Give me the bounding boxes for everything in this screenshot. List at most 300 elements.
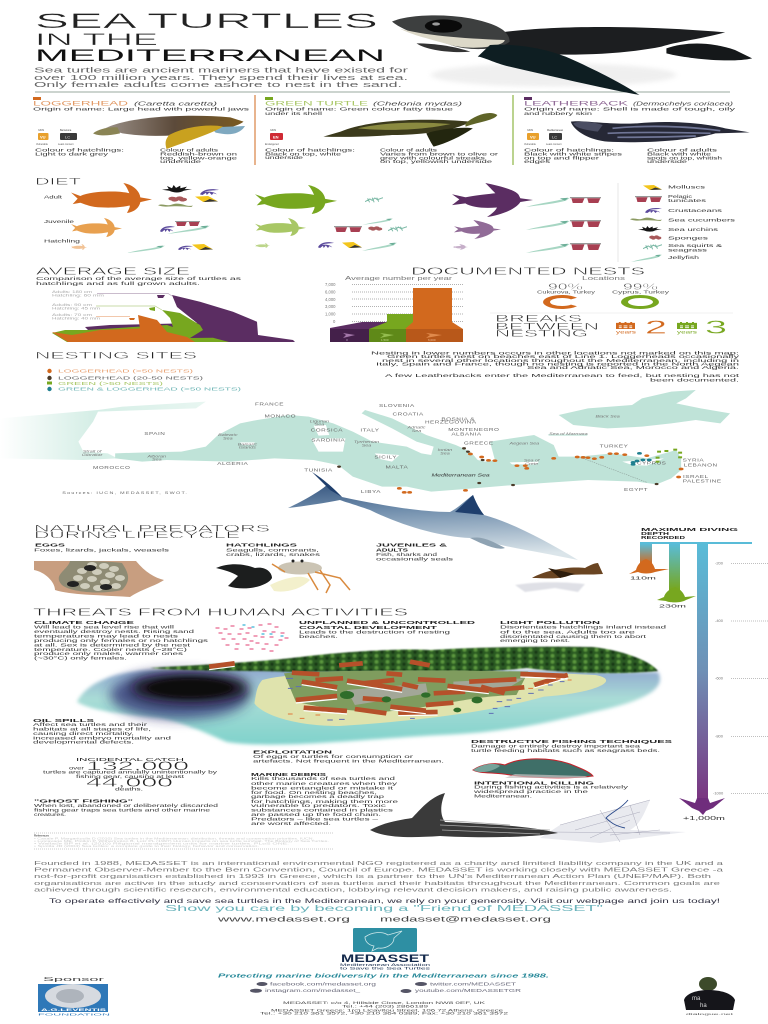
map labels: Sea — [152, 457, 162, 461]
stat: incidental catch: turtles are captured annually unintentionally by — [43, 770, 219, 774]
predator text: JUVENILES & — [376, 542, 448, 548]
call to action: To operate effectively and save sea turtles in the Mediterranean, we rely on your generosity. Visit our webpage and join us today! — [49, 899, 721, 905]
map labels: Ligurian — [310, 419, 330, 423]
text: ghost fishing: When lost, abandoned or deliberately discarded — [34, 803, 219, 808]
turtle silhouettes: loggerhead — [71, 183, 152, 250]
map labels: ALGERIA — [217, 462, 248, 467]
icon: purple turtle at 1000 m — [679, 798, 725, 815]
heading: max diving depth: MAXIMUM DIVING — [641, 527, 740, 532]
predator text: Seagulls, cormorants, — [226, 548, 319, 552]
title: SEA TURTLES — [35, 10, 378, 33]
bar chart: average nests per year: 6,000 — [325, 290, 336, 294]
text: marine debris — [251, 772, 399, 826]
food icons: green — [318, 198, 407, 251]
text: climate change: at all. Sex is determined by the nest — [34, 642, 192, 648]
badge: IUCN VU and LC: Least concern — [58, 143, 74, 146]
row labels — [44, 194, 81, 244]
nest markers — [337, 447, 684, 494]
donut: loggerhead 90% — [543, 295, 577, 309]
text: light pollution: Disorientates hatchlings inland instead — [500, 624, 667, 630]
designer figure: ha — [700, 1003, 707, 1009]
address: Tel.: +44 (203) 2866189 — [342, 1004, 428, 1008]
text: marine debris: become entangled or mistake it — [251, 786, 395, 790]
panel: maximum diving depth: 230m — [659, 604, 687, 608]
text: marine debris: garbage becomes a deadly trap — [251, 794, 385, 799]
heading: documented nests: DOCUMENTED NESTS — [411, 266, 645, 278]
panel: about MEDASSET — [34, 861, 735, 1016]
diet legend: seagrass — [668, 248, 707, 252]
text: oil spills: habitats at all stages of life, — [33, 726, 151, 732]
trees — [340, 691, 483, 712]
diet legend: Jellyfish — [668, 255, 700, 260]
badge: IUCN VU and LC: LC — [552, 134, 557, 140]
predator text: EGGS — [35, 542, 67, 548]
logo: MEDASSET: to Save the Sea Turtles — [340, 965, 430, 970]
references: References — [34, 834, 50, 838]
diet legend: Crustaceans — [668, 208, 722, 213]
text: climate change: producing only females or no hatchlings — [34, 638, 210, 643]
panel: green turtle: on top, yellowish underside — [380, 159, 493, 164]
panel: leatherback: on top and flipper — [524, 156, 600, 160]
depth bars — [640, 544, 708, 800]
map labels: MONACO — [265, 414, 296, 419]
about text — [34, 861, 725, 893]
bar chart: average nests per year: 3,000 — [325, 304, 336, 309]
map labels: Adriatic — [406, 425, 426, 429]
panel: loggerhead — [33, 97, 251, 164]
size labels — [52, 290, 104, 320]
note text: Green turtles nest on beaches east of Line 1. Loggerheads occasionally — [387, 354, 741, 359]
size labels: Hatchling: 45 mm — [52, 306, 100, 310]
size labels: Adults: 90 cm — [52, 303, 92, 307]
badge: IUCN VU and LC: Vulnerable — [36, 143, 48, 146]
text: climate change: (~30°C) only females. — [34, 656, 127, 660]
panel: threats — [33, 606, 686, 849]
map labels: LEBANON — [684, 463, 718, 468]
panel: natural predators: DURING LIFECYCLE — [34, 530, 240, 540]
predator text: Foxes, lizards, jackals, weasels — [34, 548, 170, 552]
village — [209, 662, 606, 726]
badge: IUCN VU and LC: VU — [40, 134, 46, 140]
text: exploitation — [253, 750, 444, 764]
map labels: CYPRUS — [637, 461, 666, 466]
sponsor logo: A.G.LEVENTIS — [41, 1008, 108, 1012]
sponsor logo: Sponsor — [43, 977, 105, 983]
map labels — [62, 402, 722, 495]
panel: green turtle: (Chelonia mydas) — [373, 102, 462, 108]
food icons: leatherback — [526, 197, 601, 253]
map labels: Islands — [239, 445, 257, 449]
sea — [77, 668, 660, 745]
text: marine debris: are worst affected. — [251, 821, 331, 826]
references: • Spotila JR (2004) Sea turtles: a complete guide to their biology, behavior and conservation. — [34, 844, 260, 848]
text: oil spills: causing direct mortality, — [33, 731, 134, 736]
illustration: hero turtle — [392, 15, 752, 95]
diet legend: Sea squirts & — [668, 243, 722, 248]
map labels: Sea of — [524, 458, 540, 462]
stat: nesting locations — [537, 276, 671, 309]
note text: A few Leatherbacks enter the Mediterranean to feed, but nesting has not — [385, 373, 741, 378]
map: Mediterranean — [0, 390, 730, 495]
panel: green turtle: grey with colourful streaks — [380, 156, 485, 160]
panel: breaks between nesting: years — [616, 330, 636, 334]
size labels: Hatchling: 40 mm — [52, 316, 100, 320]
panel: green turtle: GREEN TURTLE — [265, 100, 369, 108]
panel: leatherback: Black with white — [647, 152, 712, 156]
predator text: Fish, sharks and — [376, 552, 438, 557]
text: intentional killing: During fishing activities is a relatively — [474, 784, 629, 790]
illustration: juvenile turtle and shadow — [515, 563, 603, 592]
panel: leatherback — [524, 97, 750, 164]
size labels: Adults: 180 cm — [52, 290, 92, 294]
map labels: MONTENEGRO — [448, 428, 499, 433]
map labels: CORSICA — [311, 428, 343, 433]
address — [260, 1001, 508, 1016]
text: oil spills: Affect sea turtles and their — [33, 722, 148, 727]
title — [35, 10, 385, 65]
sponsor logo — [38, 977, 110, 1016]
map labels: FRANCE — [255, 402, 284, 407]
bar chart: average nests per year: 6,000 — [428, 338, 436, 342]
diet legend: Sea cucumbers — [668, 218, 735, 222]
badge: IUCN EN: IUCN — [270, 129, 276, 132]
stat: incidental catch: fishing gear, causing at least — [76, 774, 186, 779]
predator text: crabs, lizards, snakes — [226, 552, 321, 557]
text: marine debris: Kills thousands of sea turtles and — [251, 776, 396, 781]
icon: orange turtle at 110 m — [629, 559, 669, 574]
heading: max diving depth: RECORDED — [641, 535, 685, 540]
diet legend — [630, 184, 735, 262]
depth scale: -1000 — [713, 790, 724, 796]
icon: scattered hatchlings — [216, 624, 288, 651]
size labels: Adults: 70 cm — [52, 313, 92, 317]
map labels: TURKEY — [600, 444, 628, 449]
panel: leatherback: Black with white stripes — [524, 152, 622, 156]
stat: nesting locations: Cukurova, Turkey — [537, 290, 597, 294]
stat: incidental catch: INCIDENTAL CATCH — [76, 757, 185, 763]
illustration: loggerhead turtle — [93, 116, 245, 149]
stat: incidental catch: deaths. — [115, 786, 143, 792]
illustration: turtle eggs in nest — [34, 561, 164, 597]
text: intentional killing: Mediterranean. — [474, 794, 532, 798]
oil slick — [110, 671, 250, 719]
call to action — [49, 899, 721, 924]
note text: Italy, Spain and France, though no nesting is reported in the North Aegean — [376, 362, 741, 366]
text: ghost fishing: "GHOST FISHING" — [34, 798, 133, 804]
note text: been documented. — [650, 378, 739, 382]
map labels: BOSNIA & — [441, 417, 475, 422]
text: destructive fishing: DESTRUCTIVE FISHING TECHNIQUES — [471, 739, 674, 745]
text: destructive fishing: turtle feeding habitats such as seagrass beds. — [471, 748, 660, 753]
map labels: ITALY — [360, 428, 380, 433]
about text: Permanent Observer-Member to the Bern Convention, Council of Europe. MEDASSET is working closely with MEDASSET Greece -a — [34, 867, 725, 873]
panel: leatherback: spots on top, whitish — [647, 156, 723, 160]
row labels: Hatchling — [44, 238, 81, 244]
turtle silhouettes: green — [255, 185, 337, 248]
panel: loggerhead: top, yellow-orange — [160, 156, 239, 160]
map labels: Alboran — [146, 454, 167, 458]
illustration: shark — [288, 472, 578, 560]
panel: average size: hatchlings and as full grown adults. — [36, 281, 200, 286]
panel: loggerhead: underside — [160, 159, 202, 164]
panel: green turtle: Origin of name: Green colour fatty tissue — [265, 106, 454, 112]
badge: IUCN VU and LC — [36, 129, 77, 146]
icon: green turtle at 230 m — [657, 587, 696, 602]
text: destructive fishing — [471, 739, 674, 753]
illustration: polluted coast — [77, 647, 660, 745]
note text: Nesting in lower numbers occurs in other locations not marked on this map: — [371, 350, 739, 356]
bar chart: average nests per year: 3 — [346, 338, 348, 342]
map legend: GREEN & LOGGERHEAD (>50 NESTS) — [58, 386, 242, 392]
panel: leatherback: Origin of name: Shell is made of tough, oily — [524, 106, 737, 112]
icon: calendar loggerhead — [616, 322, 635, 329]
text: coastal development: UNPLANNED & UNCONTROLLED — [299, 620, 476, 626]
about text: organisations are active in the study and conservation of sea turtles and their habitats throughout the Mediterranean. Common goals are — [34, 881, 720, 887]
panel: leatherback: Colour of adults — [647, 148, 717, 152]
panel: breaks between nesting: years — [677, 330, 697, 334]
panel: green turtle: Varies from brown to olive or — [380, 152, 499, 156]
stat: nesting locations: 99% — [623, 282, 659, 292]
about text: achieved through scientific research, environmental education, lobbying relevant decision makers, and raising public awareness. — [34, 887, 673, 893]
map labels: Sea — [412, 429, 422, 433]
icon: calendar green — [677, 322, 697, 329]
social links: youtube.com/MEDASSETGR — [415, 988, 521, 993]
heading: average size: AVERAGE SIZE — [36, 266, 190, 278]
map labels: GREECE — [464, 441, 494, 446]
call to action: www.medasset.org — [216, 916, 350, 924]
predator text: HATCHLINGS — [226, 542, 299, 548]
row labels: Adult — [44, 194, 64, 200]
text: exploitation: EXPLOITATION — [253, 750, 333, 756]
heading: nesting sites: NESTING SITES — [35, 350, 197, 362]
bar chart: average nests per year: 7,000 — [325, 282, 336, 287]
text: coastal development: Leads to the destruction of nesting — [299, 630, 451, 634]
panel: breaks between nesting: BREAKS — [495, 314, 582, 325]
predator text — [34, 542, 454, 562]
references — [34, 833, 333, 849]
text: marine debris: for food. On nesting beaches, — [251, 790, 377, 795]
map labels: SLOVENIA — [379, 404, 415, 409]
panel: loggerhead: (Caretta caretta) — [134, 102, 217, 108]
panel: green turtle: Black on top, white — [265, 152, 342, 156]
diet legend: Pelagic — [668, 194, 692, 199]
text: ghost fishing: fishing gear traps sea turtles and other marine — [34, 808, 211, 812]
depth scale: -400 — [715, 618, 724, 623]
map labels: TUNISIA — [304, 468, 333, 473]
references: • Lutcavage ME, Plotkin P, Witherington B, Lutz PL (1997) Human impacts on sea turtle survival. The Biology of Sea Turtles. — [34, 839, 330, 843]
map labels: SICILY — [374, 455, 397, 460]
text: ghost fishing: creatures. — [34, 812, 66, 817]
panel: average size — [36, 266, 295, 342]
badge: IUCN EN: Endangered — [265, 143, 279, 146]
note text: Sea and Adriatic Sea, Morocco and Algeria. — [527, 365, 739, 370]
designer figure: dialogue.net — [686, 1012, 733, 1016]
references: • Casale P, Margaritoulis D (2010) Sea turtles in the Mediterranean: distribution, threats and conservation priorities. IUCN. — [34, 836, 315, 840]
panel: natural predators — [34, 524, 603, 597]
social links: instagram.com/medasset_ — [265, 988, 361, 993]
map labels: Sea — [440, 451, 450, 455]
designer figure: ma — [692, 996, 701, 1002]
panel: breaks between nesting: NESTING — [495, 329, 588, 340]
panel: leatherback: (Dermochelys coriacea) — [633, 102, 733, 108]
text: light pollution — [500, 620, 667, 643]
text: marine debris: are passed up the food chain. — [251, 812, 381, 817]
turtle silhouettes: leatherback — [452, 183, 533, 250]
panel: leatherback: underside — [647, 159, 688, 164]
row labels: Juvenile — [44, 219, 75, 224]
panel: green turtle — [265, 97, 499, 164]
map labels: Black Sea — [596, 414, 620, 418]
heading: diet: DIET — [35, 176, 82, 186]
text: light pollution: emerging to nest. — [500, 638, 570, 643]
diet legend: Sponges — [668, 236, 708, 240]
text: exploitation: Of eggs or turtles for consumption or — [253, 754, 414, 759]
tagline: Protecting marine biodiversity in the Mediterranean since 1988. — [218, 974, 550, 980]
text: climate change: Will lead to sea level rise that will — [34, 624, 174, 630]
depth scale — [713, 560, 768, 796]
panel: maximum diving depth — [629, 527, 768, 822]
text: exploitation: artefacts. Not frequent in the Mediterranean. — [253, 758, 444, 764]
designer figure — [684, 977, 735, 1016]
diet legend: Sea urchins — [668, 227, 718, 232]
map legend — [47, 368, 242, 392]
stat: incidental catch — [43, 757, 219, 792]
panel: green turtle: Colour of hatchlings: — [265, 148, 355, 152]
panel: diet — [35, 176, 735, 262]
map labels: Sea of Marmara — [549, 432, 588, 436]
text: climate change: CLIMATE CHANGE — [34, 620, 136, 626]
depth scale: -600 — [715, 676, 724, 680]
bar chart: average nests per year: 0 — [333, 319, 336, 324]
map labels: Sea — [362, 443, 372, 447]
panel: maximum diving depth: +1,000m — [683, 816, 725, 822]
call to action: Show you care by becoming a "Friend of MEDASSET" — [165, 904, 603, 913]
text: oil spills: increased embryo mortality and — [33, 736, 172, 740]
heading: max diving depth — [641, 527, 740, 540]
stat: incidental catch: 44,000 — [86, 778, 173, 790]
size labels: Hatchling: 60 mm — [52, 294, 104, 298]
map labels: CROATIA — [393, 412, 424, 417]
text: intentional killing: widespread practice in the — [474, 789, 589, 794]
heading: threats: THREATS FROM HUMAN ACTIVITIES — [33, 606, 408, 618]
map labels: Gibraltar — [82, 453, 103, 457]
panel: breaks between nesting: 2 — [645, 318, 667, 338]
note text: nest in several other locations throughout the Mediterranean, including in — [382, 358, 741, 363]
panel: leatherback: LEATHERBACK — [524, 100, 629, 108]
badge: IUCN VU and LC: Barcelona — [60, 129, 72, 132]
heading: natural predators: NATURAL PREDATORS — [34, 524, 270, 534]
stat: nesting locations: 90% — [548, 282, 584, 292]
stat: nesting locations: Locations — [582, 276, 626, 282]
illustration: green turtle — [323, 113, 497, 147]
donut: green 99% — [621, 295, 659, 309]
text: marine debris: MARINE DEBRIS — [251, 772, 328, 778]
text: destructive fishing: Damage or entirely destroy important sea — [471, 744, 641, 748]
map labels: MOROCCO — [93, 466, 130, 471]
badge: IUCN EN — [265, 129, 283, 146]
text: marine debris: Predators – like sea turtles – — [251, 816, 379, 822]
map labels: Mediterranean Sea — [431, 473, 491, 478]
badge: IUCN VU and LC: Least concern — [546, 143, 562, 146]
map labels: Balearic — [238, 442, 258, 446]
panel: average size: Comparison of the average size of turtles as — [36, 276, 243, 281]
map labels: SPAIN — [144, 432, 165, 437]
map labels: MALTA — [386, 465, 408, 470]
silhouettes: size comparison — [52, 295, 295, 342]
depth scale: -800 — [715, 734, 724, 738]
badge: IUCN VU and LC: IUCN — [38, 129, 44, 132]
text: light pollution: LIGHT POLLUTION — [500, 620, 601, 626]
map labels: LIBYA — [361, 490, 381, 495]
badge: IUCN VU and LC: LC — [65, 134, 70, 140]
map legend: LOGGERHEAD (20-50 NESTS) — [58, 376, 204, 380]
map labels: SARDINIA — [311, 438, 345, 443]
intro text: over 100 million years. They spend their lives at sea. — [34, 73, 408, 82]
address: Tel.: +30 210 361 3572, +30 210 364 0389, Fax: +30 210 361 3572 — [260, 1012, 508, 1016]
panel: leatherback: and rubbery skin — [524, 111, 593, 116]
illustration: leatherback turtle — [571, 121, 750, 142]
map labels: Strait of — [83, 449, 102, 453]
map labels: Sea — [223, 436, 233, 440]
address: MEDASSET: c/o 4, Hillside Close, London NW8 0EF, UK — [283, 1001, 486, 1005]
badge: IUCN VU and LC: VU — [530, 134, 536, 140]
roofs — [209, 662, 568, 716]
panel: loggerhead: Origin of name: Large head with powerful jaws — [33, 106, 251, 112]
panel: breaks between nesting: 3 — [705, 318, 727, 338]
bar chart: average nests per year: 4,000 — [325, 297, 336, 302]
bar chart: average nests per year: Average number per year — [345, 276, 453, 282]
text: marine debris: other marine creatures when they — [251, 781, 398, 786]
text: ghost fishing — [34, 798, 219, 817]
logo: MEDASSET: Mediterranean Association — [340, 962, 430, 967]
map labels: PALESTINE — [683, 479, 722, 484]
map labels: EGYPT — [624, 488, 648, 493]
panel: leatherback: Colour of hatchlings: — [524, 148, 614, 152]
map labels: Sources: IUCN, MEDASSET, SWOT. — [62, 491, 188, 495]
map legend: LOGGERHEAD (>50 NESTS) — [58, 368, 194, 374]
text: light pollution: disorientated causing them to abort — [500, 634, 647, 639]
diet legend: Molluscs — [668, 184, 705, 190]
title: MEDITERRANEAN — [35, 46, 385, 65]
badge: IUCN VU and LC — [524, 129, 564, 146]
logo: MEDASSET: MEDASSET — [341, 953, 429, 965]
about text: not-for-profit organisation established in 1993 in Greece, which is a partner to the UN's Mediterranean Action Plan (UNEP/MAP). Both — [34, 874, 711, 880]
text: light pollution: of to the sea. Adults too are — [500, 630, 636, 634]
forest — [150, 647, 658, 673]
panel: green turtle: underside — [265, 155, 304, 160]
badge: IUCN VU and LC: IUCN — [527, 129, 533, 132]
food icons: loggerhead — [127, 185, 219, 253]
references: • Wallace BP et al. (2010) Regional management units for marine turtles. PLoS ONE. — [34, 842, 290, 846]
sponsor logo: FOUNDATION — [38, 1012, 110, 1016]
map labels: HERZEGOVINA — [425, 420, 477, 425]
intro text: Only female adults come ashore to nest in the sand. — [34, 80, 402, 89]
intro text: Sea turtles are ancient mariners that have existed for — [34, 66, 409, 74]
depth scale: -200 — [715, 560, 724, 566]
map labels: SYRIA — [683, 458, 704, 463]
text: climate change: temperatures may lead to nests — [34, 634, 180, 638]
intro text — [34, 66, 409, 89]
about text: Founded in 1988, MEDASSET is an international environmental NGO registered as a charity and limited liability company in the UK and a — [34, 861, 725, 867]
badge: IUCN VU and LC: Vulnerable — [524, 143, 536, 146]
text: marine debris: vulnerable to predators. Toxic — [251, 803, 388, 808]
predator text: occasionally seals — [376, 556, 454, 562]
stat: incidental catch: 132,000 — [86, 761, 189, 773]
text: intentional killing — [474, 780, 629, 798]
bar chart: average nests per year: 1,000 — [325, 312, 336, 316]
text: marine debris: substances contained in plastics — [251, 808, 394, 812]
social links: facebook.com/medasset.org — [270, 982, 377, 986]
